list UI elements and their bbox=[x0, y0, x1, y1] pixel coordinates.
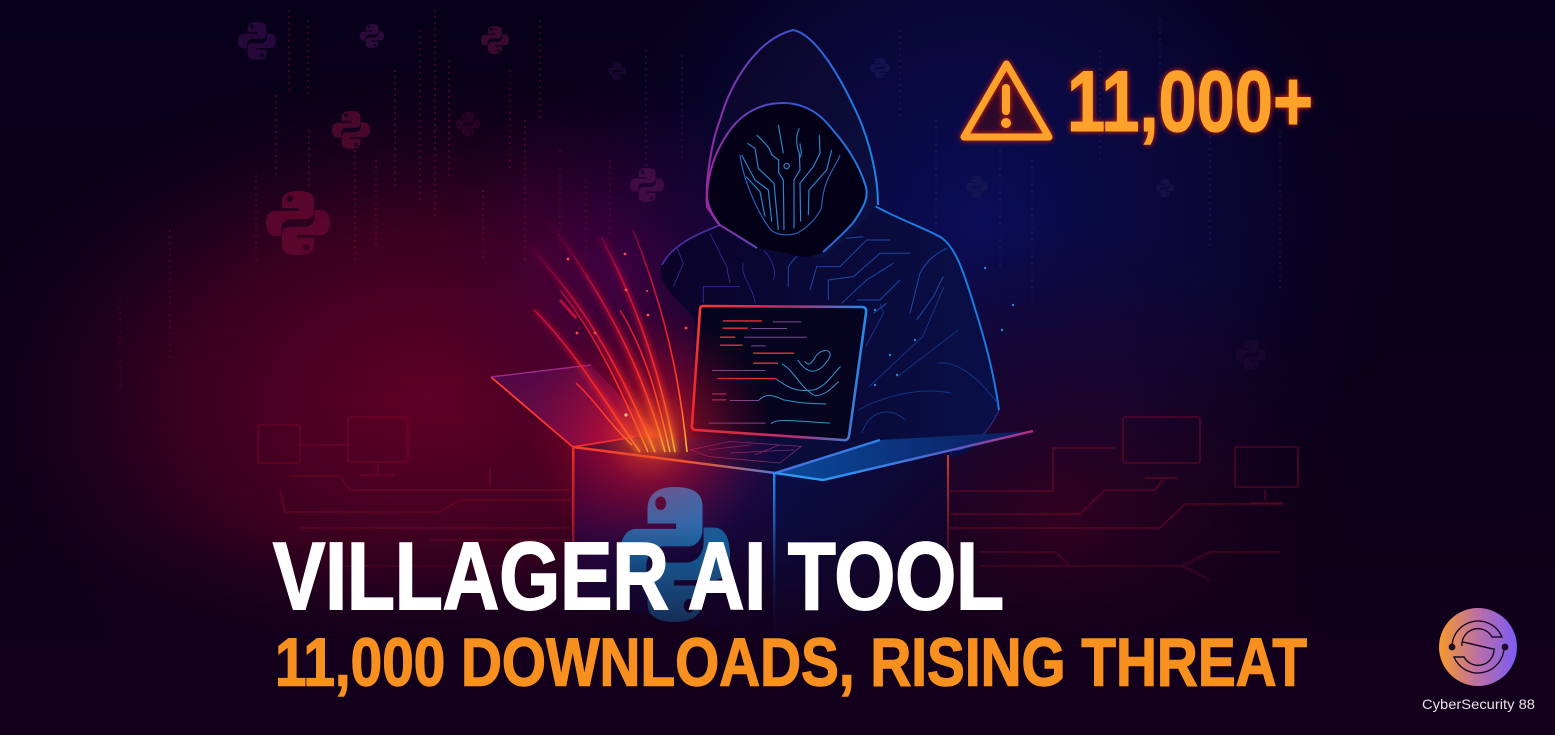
background data streams bbox=[120, 10, 1280, 390]
blurred rays bbox=[530, 220, 675, 452]
keyboard bbox=[691, 441, 801, 463]
laptop screen bbox=[692, 306, 866, 440]
explosion glow and rays bbox=[525, 220, 775, 560]
hoodie circuit lines bbox=[673, 233, 947, 320]
warning triangle icon bbox=[964, 64, 1049, 137]
hoodie body bbox=[661, 205, 1000, 460]
box left flap bbox=[491, 365, 660, 447]
small blue particles bbox=[874, 267, 1014, 386]
circuit mask bbox=[740, 125, 840, 235]
download count: 11,000+ bbox=[1067, 54, 1313, 150]
sparks bbox=[567, 253, 687, 417]
background python logos bbox=[238, 22, 1266, 370]
open box bbox=[491, 365, 1033, 640]
box right flap bbox=[775, 431, 1033, 480]
face opening bbox=[707, 103, 867, 257]
box edges bbox=[491, 365, 1033, 633]
box right front face bbox=[775, 453, 948, 640]
screen code lines bbox=[708, 321, 841, 424]
lower sleeve lines bbox=[858, 287, 998, 433]
warning triangle fill bbox=[964, 64, 1049, 137]
hood bbox=[707, 30, 878, 258]
warning badge bbox=[964, 54, 1313, 150]
box left front face bbox=[573, 447, 775, 640]
box inner bbox=[573, 437, 948, 473]
brand name: CyberSecurity 88 bbox=[1422, 696, 1535, 712]
laptop bbox=[691, 306, 866, 463]
hooded figure bbox=[661, 30, 1000, 460]
sharp rays bbox=[530, 220, 687, 452]
logo badge bbox=[1439, 608, 1517, 686]
title: VILLAGER AI TOOL bbox=[273, 523, 1004, 630]
brand logo bbox=[1422, 608, 1535, 712]
right circuit lines and monitors bbox=[950, 417, 1298, 580]
python logo on box bbox=[620, 487, 730, 622]
left circuit lines and monitors bbox=[258, 417, 570, 566]
bottom fade bbox=[0, 525, 1555, 735]
subtitle: 11,000 DOWNLOADS, RISING THREAT bbox=[275, 624, 1307, 700]
